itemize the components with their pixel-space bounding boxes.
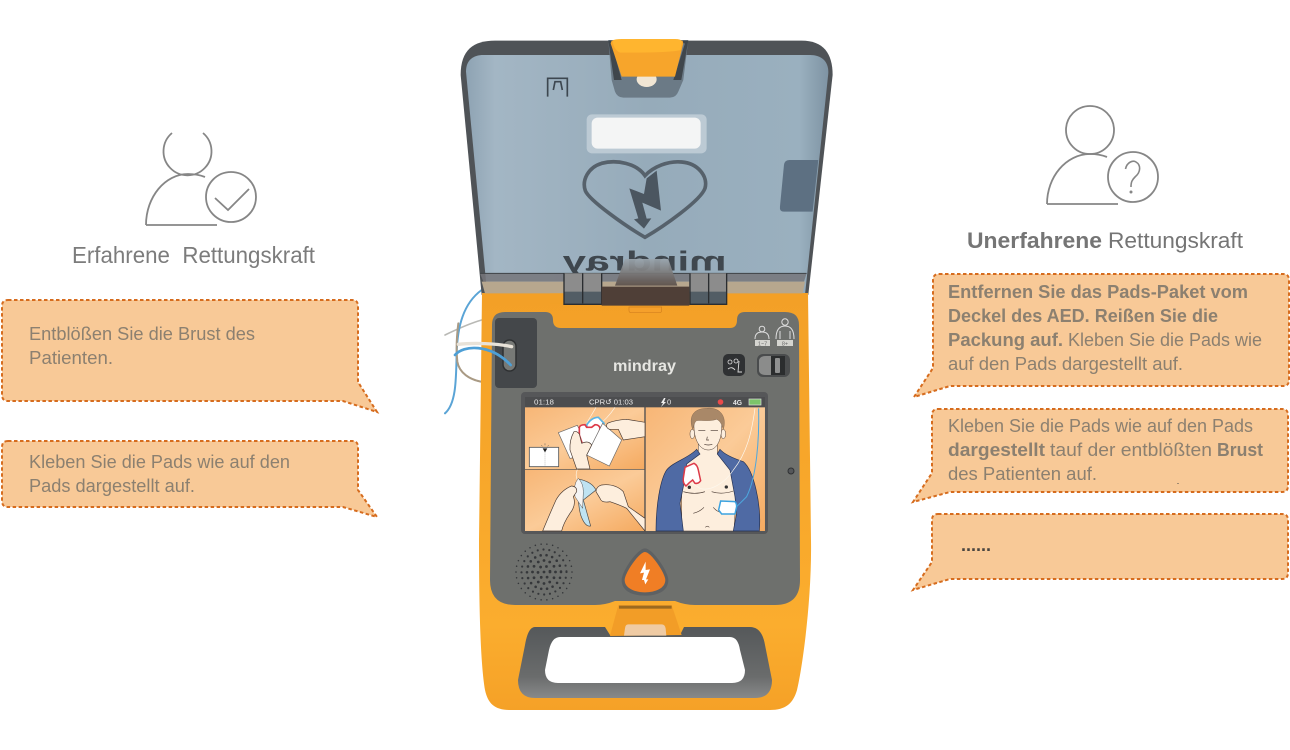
callout: bare the chest: Entblößen Sie die Brust des: [29, 324, 255, 344]
patient age icons: 8+: [782, 341, 788, 347]
panel: opening the pads package: [529, 407, 645, 469]
blue pad: [719, 501, 737, 514]
status bar: 01:18: [534, 398, 554, 406]
heading: experienced rescuer: Erfahrene Rettungskraft: [72, 242, 316, 268]
patient age icons: [755, 319, 794, 347]
latch coin: [637, 72, 657, 87]
shock button: [622, 548, 668, 596]
hand right: [607, 419, 645, 440]
carrying handle: [518, 627, 772, 698]
ears: [690, 429, 695, 439]
facial features: [698, 431, 718, 445]
latch recess: [608, 40, 688, 98]
blue pad sheet: [578, 479, 596, 526]
left hinge block: [564, 273, 602, 305]
callout: remove pads package: Deckel des AED. Reißen Sie die: [948, 306, 1218, 326]
panel: pads on the patient: [656, 408, 760, 531]
pediatric button: [723, 354, 745, 376]
side tab: [780, 160, 818, 212]
hand left: [543, 486, 577, 531]
slider switch: [757, 354, 790, 377]
connector block: [495, 318, 537, 388]
brand logo: mindray: [613, 358, 676, 375]
hand right: [596, 485, 645, 531]
callout: bare the chest: Patienten.: [29, 348, 113, 368]
hair: [691, 408, 724, 429]
callout: ellipsis: [913, 514, 1288, 590]
lid of the device: [461, 39, 833, 295]
wires: [587, 407, 615, 423]
connector socket: [503, 340, 516, 371]
heading: inexperienced rescuer: [967, 228, 1243, 253]
hinge assembly: [480, 259, 807, 313]
callout: apply the pads: Kleben Sie die Pads wie auf den: [29, 452, 290, 472]
pad wires outside the device: [445, 290, 482, 413]
panel: unfolding the pads: [543, 470, 645, 531]
blue pad: [587, 417, 604, 432]
lightning icon: [640, 562, 650, 584]
lower latch: [610, 605, 682, 636]
face: [694, 416, 722, 450]
callout: ellipsis: ......: [961, 535, 991, 555]
panel: experienced rescuer: [2, 133, 377, 517]
body of the device: [479, 293, 811, 710]
status bar: CPR↺ 01:03: [589, 398, 633, 406]
status bar: [534, 398, 761, 407]
shirt right: [717, 449, 760, 531]
status bar: 0: [667, 398, 671, 406]
cables into socket: [455, 343, 512, 365]
centre tab: [615, 259, 677, 286]
panel: inexperienced rescuer: [913, 106, 1289, 590]
orange latch: [611, 41, 683, 77]
hand left: [570, 431, 592, 469]
red pad: [579, 425, 600, 450]
wires: [692, 408, 755, 489]
callout: remove pads package: [914, 274, 1289, 397]
right hinge block: [689, 273, 727, 305]
gray front panel: [490, 312, 800, 605]
callout: apply pads on bare chest: Brust: [1217, 440, 1263, 460]
illustration panels: [525, 407, 765, 531]
callout: remove pads package: auf den Pads dargestellt auf.: [948, 354, 1183, 374]
callout: bare the chest: [2, 300, 377, 412]
callout: apply the pads: Pads dargestellt auf.: [29, 476, 195, 496]
screen: [521, 392, 768, 534]
heading: inexperienced rescuer: Unerfahrene: [967, 228, 1102, 253]
white liner: [574, 478, 583, 508]
chest lines and nipples: [688, 486, 691, 489]
red pad: [683, 463, 701, 486]
small orange tab: [629, 307, 662, 313]
hook clip: [548, 78, 567, 97]
patient age icons: 1~7: [758, 341, 767, 347]
label window: [587, 114, 707, 153]
icon: person with check mark: [146, 133, 256, 225]
translucent lid edge bands: [480, 273, 807, 282]
status bar: 4G: [733, 398, 742, 407]
speaker grille: [516, 544, 572, 600]
shirt left: [656, 449, 700, 531]
package sheet left: [558, 425, 592, 458]
centre hinge: [602, 287, 689, 306]
mirrored brand name: mindray: [562, 246, 727, 277]
callout: remove pads package: Packung auf.: [948, 330, 1063, 350]
callout: apply pads on bare chest: des Patienten auf.: [948, 464, 1097, 484]
small sensor hole: [788, 468, 794, 474]
callout: apply pads on bare chest: tauf der entblößten: [1050, 440, 1212, 460]
callout: remove pads package: Entfernen Sie das Pads-Paket vom: [948, 282, 1248, 302]
callout: apply pads on bare chest: [913, 409, 1288, 502]
mini package icon: [529, 443, 559, 467]
package sheet right: [587, 423, 622, 466]
callout: apply pads on bare chest: dargestellt: [948, 440, 1045, 460]
heart with lightning bolt: [584, 162, 706, 237]
panel: AED device: [445, 39, 833, 710]
icon: person with question mark: [1047, 106, 1158, 204]
callout: remove pads package: Kleben Sie die Pads wie: [1068, 330, 1262, 350]
callout: apply the pads: [2, 441, 377, 517]
torso: [682, 440, 736, 531]
heading: inexperienced rescuer: Rettungskraft: [1108, 228, 1243, 253]
callout: apply pads on bare chest: Kleben Sie die Pads wie auf den Pads: [948, 416, 1253, 436]
